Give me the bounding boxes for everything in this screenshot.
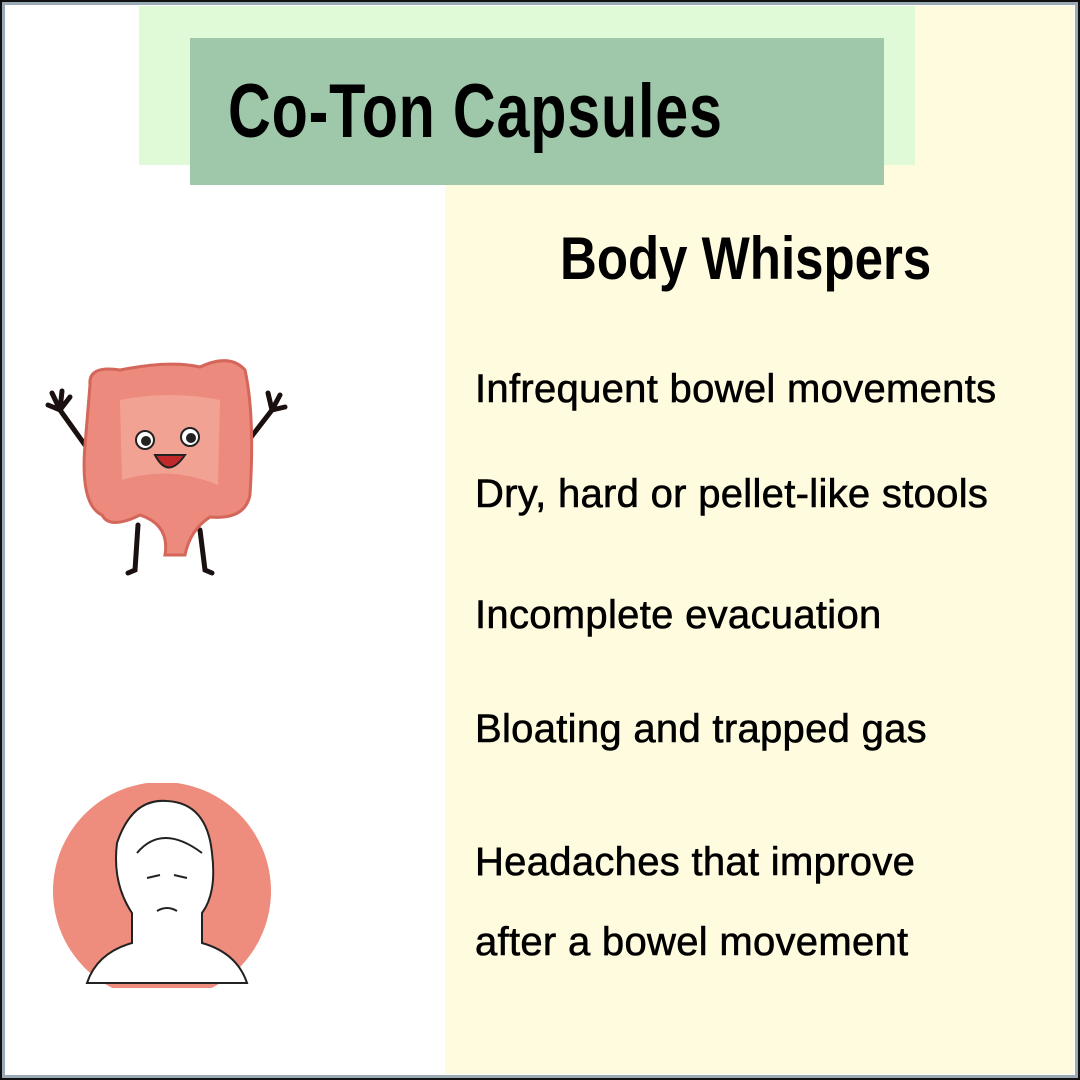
item 3: Incomplete evacuation <box>475 593 882 637</box>
icon: woman with headache <box>53 783 271 988</box>
title: Co-Ton Capsules <box>228 69 723 154</box>
icon: happy intestine <box>46 359 288 576</box>
item 5: after a bowel movement <box>475 920 908 964</box>
item 1: Infrequent bowel movements <box>475 367 996 411</box>
item 5: Headaches that improve <box>475 840 915 884</box>
header light green band <box>139 6 915 165</box>
item 4: Bloating and trapped gas <box>475 707 927 751</box>
item 2: Dry, hard or pellet-like stools <box>475 472 988 516</box>
heading: Body Whispers: Body Whispers <box>560 225 931 292</box>
item 5 <box>475 840 915 964</box>
panel: right cream background <box>445 6 1074 1074</box>
title box <box>190 38 884 185</box>
